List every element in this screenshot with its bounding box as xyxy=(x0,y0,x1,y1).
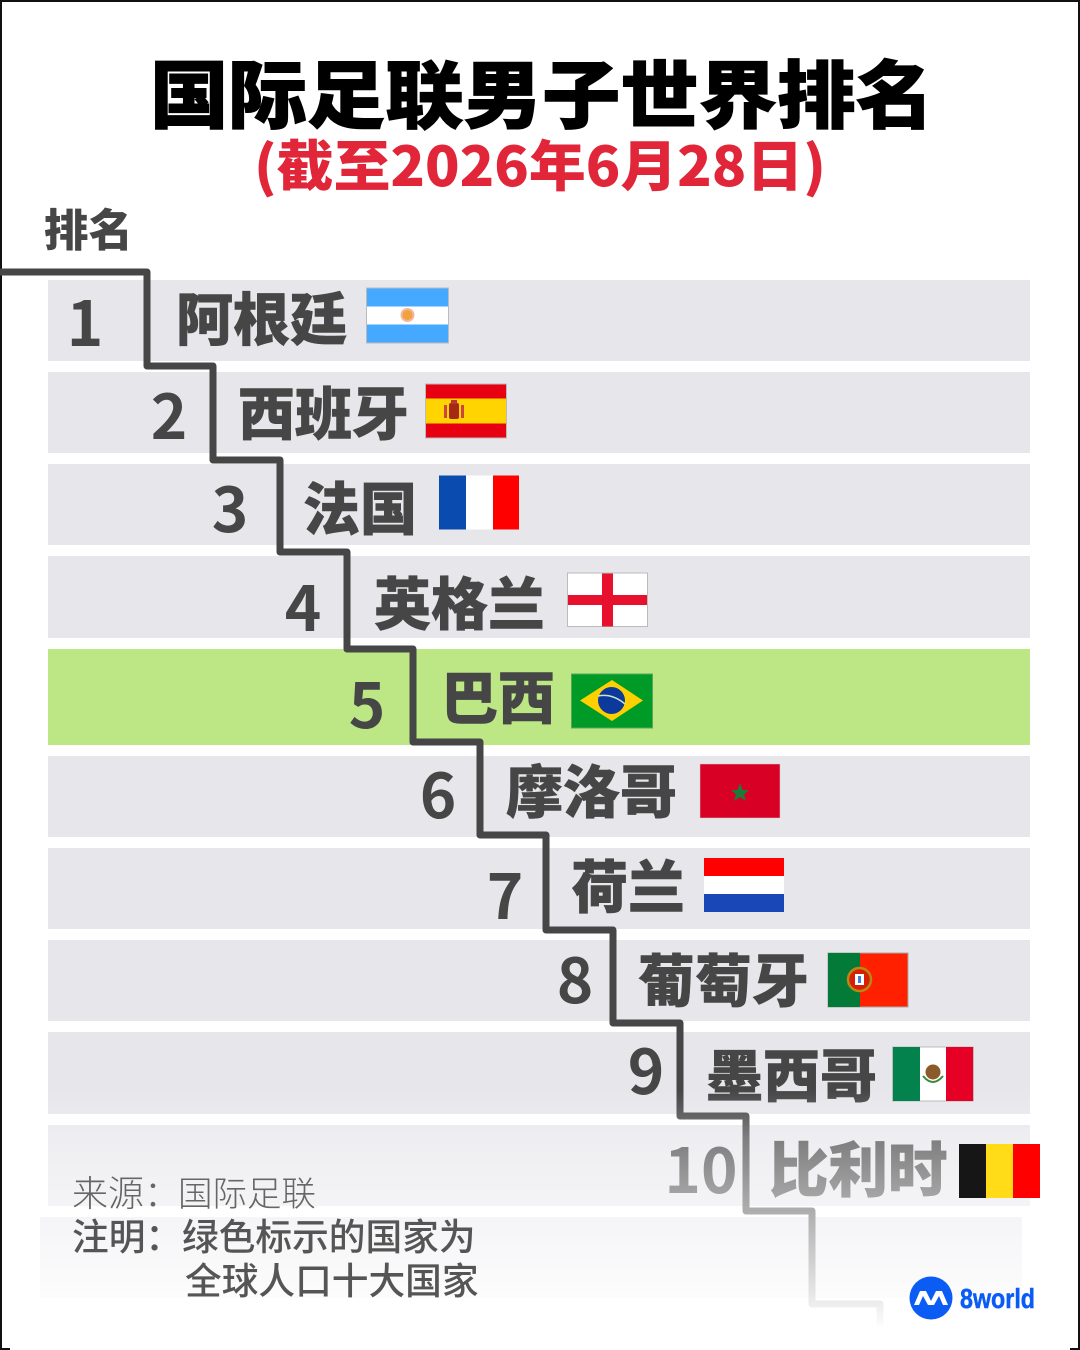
rank 1: Argentina: 1 xyxy=(67,274,103,364)
flag: Morocco xyxy=(700,764,780,818)
rank 2: Spain: 西班牙 xyxy=(238,370,409,452)
rank 1: Argentina: 阿根廷 xyxy=(176,275,347,357)
rank 4: England xyxy=(285,559,545,649)
rank 4: England: 4 xyxy=(285,559,321,649)
rank 10: Belgium: 10 xyxy=(664,1121,738,1211)
rank 3: France: 3 xyxy=(212,460,248,550)
rank 5: Brazil: 巴西 xyxy=(441,654,555,736)
rank 7: Netherlands xyxy=(487,842,685,937)
rank 5: Brazil xyxy=(349,654,555,746)
rank 9: Mexico xyxy=(628,1022,877,1114)
note: green highlight: 绿色标示的国家为 xyxy=(182,1207,476,1261)
source note xyxy=(72,1165,316,1217)
rank 10: Belgium: 比利时 xyxy=(769,1124,948,1210)
staircase line xyxy=(0,272,880,1326)
note: green highlight xyxy=(72,1207,479,1305)
rank 2: Spain: 2 xyxy=(151,367,187,457)
axis label: rank: 排名 xyxy=(44,194,133,259)
row backgrounds xyxy=(40,280,1030,1298)
logo: 8world: 8world xyxy=(960,1283,1035,1314)
rank 8: Portugal: 葡萄牙 xyxy=(638,936,809,1018)
rank 6: Morocco: 摩洛哥 xyxy=(506,748,677,830)
flag: Mexico xyxy=(892,1047,974,1101)
rank 7: Netherlands: 7 xyxy=(487,847,523,937)
subtitle: date: (截至2026年6月28日) xyxy=(254,122,826,202)
flag: Brazil xyxy=(572,674,652,728)
flag: France xyxy=(439,476,519,530)
rank 9: Mexico: 9 xyxy=(628,1022,664,1112)
source note: 来源： xyxy=(72,1165,180,1217)
rank 3: France xyxy=(212,460,417,550)
rank 6: Morocco xyxy=(420,746,677,836)
flag: England xyxy=(568,573,648,626)
rank 7: Netherlands: 荷兰 xyxy=(571,842,685,924)
rank 2: Spain xyxy=(151,367,409,457)
rank 3: France: 法国 xyxy=(303,464,417,546)
flag: Belgium xyxy=(959,1144,1040,1198)
title: 国际足联男子世界排名 xyxy=(150,37,934,144)
rank 6: Morocco: 6 xyxy=(420,746,456,836)
rank 10: Belgium xyxy=(664,1121,948,1211)
rank 8: Portugal: 8 xyxy=(557,931,593,1021)
flag: Portugal xyxy=(828,953,908,1007)
rank 1: Argentina xyxy=(67,274,347,364)
note: green highlight: 注明： xyxy=(72,1207,182,1261)
flag: Netherlands xyxy=(704,858,784,912)
logo: 8world xyxy=(910,1276,1035,1320)
flag: Spain xyxy=(426,384,506,438)
fade overlay xyxy=(3,1090,1077,1330)
rank 4: England: 英格兰 xyxy=(374,560,545,642)
rank 8: Portugal xyxy=(557,931,809,1021)
rank 9: Mexico: 墨西哥 xyxy=(706,1032,877,1114)
note: green highlight: 全球人口十大国家 xyxy=(185,1251,479,1305)
flag: Argentina xyxy=(366,288,448,343)
rank 5: Brazil: 5 xyxy=(349,656,385,746)
source note: 国际足联 xyxy=(178,1166,316,1216)
